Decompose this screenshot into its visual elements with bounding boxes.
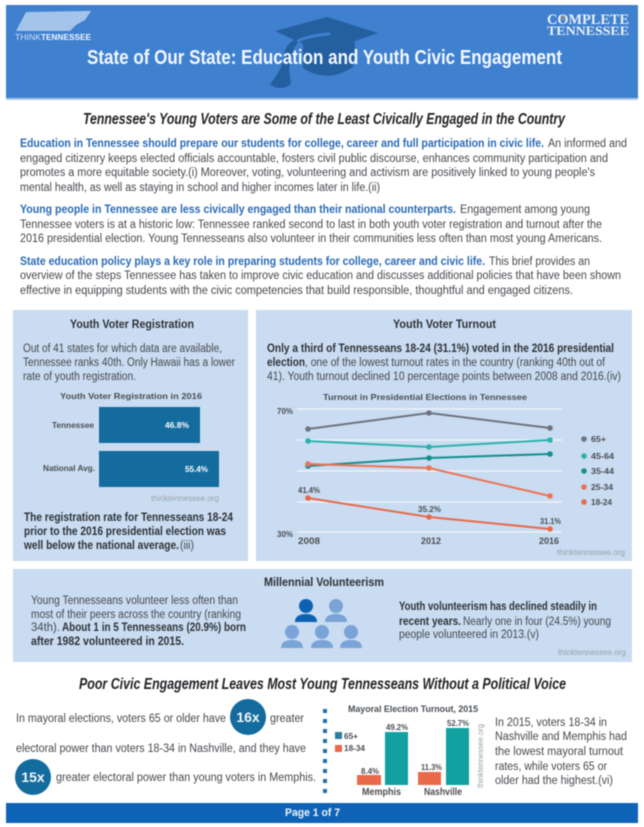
- text: electoral power: greater electoral power than young voters in Memphis.: [56, 772, 316, 784]
- intro text block: overview of the steps Tennessee has taken to improve civic education and discusses additional policies that have been shown: [20, 270, 621, 282]
- text: volunteer ranking: [31, 595, 246, 648]
- bar chart: mayoral election turnout: Nashville: [424, 787, 462, 798]
- bar chart: mayoral election turnout: Mayoral Election Turnout, 2015: [348, 704, 479, 715]
- text: turnout summary: , one of the lowest turnout rates in the country (ranking 40th out of: [305, 357, 606, 369]
- legend: age groups: 45-64: [591, 451, 614, 461]
- text: volunteer ranking: after 1982 volunteered in 2015.: [31, 636, 184, 648]
- line chart: turnout: 2012: [421, 536, 441, 546]
- text: electoral power: In mayoral elections, voters 65 or older have: [16, 713, 226, 725]
- bar chart: registration: 55.4%: [185, 464, 208, 474]
- series: 18-24: [305, 495, 553, 532]
- text: volunteer decline: people volunteered in 2013.(v): [399, 629, 539, 641]
- legend: age groups: 25-34: [591, 482, 613, 492]
- bar chart: mayoral election turnout: 8.4%: [361, 766, 379, 776]
- text: registration rank: rate of youth registration.: [23, 371, 136, 383]
- text: volunteer decline: Youth volunteerism has declined steadily in: [399, 601, 597, 613]
- panel heading: registration: Youth Voter Registration: [70, 319, 194, 331]
- title: State of Our State: Education and Youth Civic Engagement: [87, 47, 562, 69]
- intro text block: engaged citizenry keeps elected officials accountable, fosters civil public discourse, enhances community participation and: [20, 153, 608, 165]
- legend: age groups: [581, 434, 614, 507]
- intro text block: 2016 presidential election. Young Tennesseans also volunteer in their communities less often than most young Americans.: [20, 233, 602, 245]
- logo: ThinkTennessee: [15, 11, 91, 42]
- line chart: turnout: 41.4%: [298, 485, 320, 495]
- logo: Complete Tennessee: [547, 12, 629, 38]
- text: mayoral turnout note: the lowest mayoral turnout: [495, 746, 624, 758]
- intro text block: Education in Tennessee should prepare our students for college, career and full participation in civic life.: [20, 138, 544, 150]
- bar chart: mayoral election turnout: 52.7%: [447, 718, 469, 728]
- text: turnout summary: [267, 343, 621, 383]
- panel: youth voter registration: [13, 310, 248, 561]
- line chart: turnout: Turnout in Presidential Elections in Tennessee: [323, 392, 527, 402]
- text: mayoral turnout note: Nashville and Memphis had: [495, 731, 627, 743]
- intro text block: State education policy plays a key role in preparing students for college, career and civic life.: [20, 256, 485, 268]
- text: volunteer decline: [399, 601, 611, 641]
- text: registration rank: Tennessee ranks 40th. Only Hawaii has a lower: [23, 357, 235, 369]
- icon: group of people: [281, 599, 362, 648]
- bar chart: mayoral election turnout: 11.3%: [421, 762, 442, 772]
- text: mayoral turnout note: rates, while voters 65 or: [495, 761, 607, 773]
- callout: 16x: 16x: [236, 709, 260, 725]
- bar chart: registration: Tennessee: [52, 420, 94, 430]
- legend: age groups: 65+: [591, 434, 606, 444]
- line chart: turnout: 35.2%: [418, 504, 441, 514]
- intro text block: This brief provides an: [489, 256, 590, 268]
- legend: age groups: 35-44: [591, 466, 614, 476]
- panel: millennial volunteerism: [13, 569, 632, 662]
- text: volunteer decline: recent years.: [399, 616, 461, 628]
- text: volunteer ranking: 34th).: [31, 622, 60, 634]
- intro text block: Engagement among young: [460, 204, 590, 216]
- text: volunteer ranking: About 1 in 5 Tennesseans (20.9%) born: [62, 622, 246, 634]
- text: electoral power: greater: [270, 713, 304, 725]
- intro text block: effective in equipping students with the civic competencies that build responsible, thoughtful and engaged citizens.: [20, 285, 573, 297]
- callout: 15x: [15, 759, 51, 795]
- text: registration takeaway: prior to the 2016 presidential election was: [24, 526, 226, 538]
- logo: Complete Tennessee: TENNESSEE: [547, 24, 629, 38]
- panel: millennial volunteerism: thinktennessee.org: [558, 648, 626, 657]
- text: volunteer ranking: Young Tennesseans volunteer less often than: [31, 595, 238, 607]
- text: mayoral turnout note: In 2015, voters 18-34 in: [495, 717, 607, 729]
- line chart: turnout: [277, 392, 625, 557]
- series: 25-34: [305, 461, 553, 499]
- intro text block: Tennessee voters is at a historic low: Tennessee ranked second to last in both youth voter registration and turnout after the: [20, 219, 602, 231]
- series: 65+: [305, 410, 553, 432]
- callout: 15x: 15x: [21, 769, 45, 785]
- legend: age groups: 18-24: [591, 497, 612, 507]
- text: mayoral turnout note: older had the highest.(vi): [495, 775, 613, 787]
- bar chart: mayoral election turnout: Memphis: [362, 787, 401, 798]
- text: registration takeaway: (iii): [180, 540, 194, 552]
- series: 35-44: [305, 451, 553, 469]
- bar chart: registration: Youth Voter Registration in 2016: [60, 391, 202, 401]
- bar chart: registration: [43, 391, 219, 503]
- bar chart: mayoral election turnout: thinktennessee.org: [476, 724, 485, 788]
- text: volunteer decline: Nearly one in four (24.5%) young: [463, 616, 611, 628]
- panel heading: volunteerism: Millennial Volunteerism: [264, 577, 384, 589]
- icon: graduation cap: [270, 17, 378, 88]
- line chart: turnout: 2016: [539, 536, 559, 546]
- text: volunteer ranking: most of their peers across the country (ranking: [31, 609, 241, 621]
- intro text block: [20, 138, 627, 297]
- text: mayoral turnout note: [495, 717, 627, 787]
- callout: 16x: [230, 699, 266, 735]
- bar chart: mayoral election turnout: 49.2%: [386, 722, 408, 732]
- line chart: turnout: 30%: [277, 529, 293, 539]
- text: registration rank: Out of 41 states for which data are available,: [23, 343, 222, 355]
- series: 45-64: [305, 437, 553, 450]
- line chart: turnout: thinktennessee.org: [557, 548, 625, 557]
- header banner: [6, 5, 638, 100]
- bar chart: mayoral election turnout: [323, 704, 485, 798]
- footer bar: [6, 803, 638, 823]
- logo: ThinkTennessee: THINK: [15, 32, 41, 42]
- legend: mayoral: [335, 731, 365, 753]
- text: electoral power: [15, 699, 316, 795]
- line chart: turnout: 70%: [277, 406, 293, 416]
- line chart: turnout: 31.1%: [540, 516, 561, 526]
- text: registration takeaway: [23, 512, 234, 552]
- text: registration rank: [23, 343, 235, 383]
- intro text block: An informed and: [548, 138, 627, 150]
- intro text block: promotes a more equitable society.(i) Moreover, voting, volunteering and activism are positively linked to young people's: [20, 167, 595, 179]
- footer bar: Page 1 of 7: [285, 807, 340, 819]
- bar chart: registration: National Avg.: [43, 463, 95, 473]
- text: registration takeaway: well below the national average.: [23, 540, 179, 552]
- bar chart: registration: thinktennessee.org: [151, 494, 219, 503]
- intro text block: mental health, as well as staying in school and higher incomes later in life.(ii): [20, 182, 380, 194]
- legend: mayoral: 18-34: [344, 743, 365, 753]
- panel: youth voter turnout: [256, 310, 632, 561]
- logo: Complete Tennessee: COMPLETE: [547, 12, 629, 28]
- legend: mayoral: 65+: [344, 731, 358, 741]
- panel heading: turnout: Youth Voter Turnout: [393, 319, 496, 331]
- text: turnout summary: election: [267, 357, 305, 369]
- line chart: turnout: 2008: [298, 536, 320, 546]
- intro text block: Young people in Tennessee are less civically engaged than their national counterparts.: [20, 204, 456, 216]
- text: electoral power: electoral power than voters 18-34 in Nashville, and they have: [16, 743, 306, 755]
- logo: ThinkTennessee: TENNESSEE: [41, 32, 91, 42]
- bar chart: registration: 46.8%: [165, 420, 189, 430]
- text: registration takeaway: The registration rate for Tennesseans 18-24: [24, 512, 234, 524]
